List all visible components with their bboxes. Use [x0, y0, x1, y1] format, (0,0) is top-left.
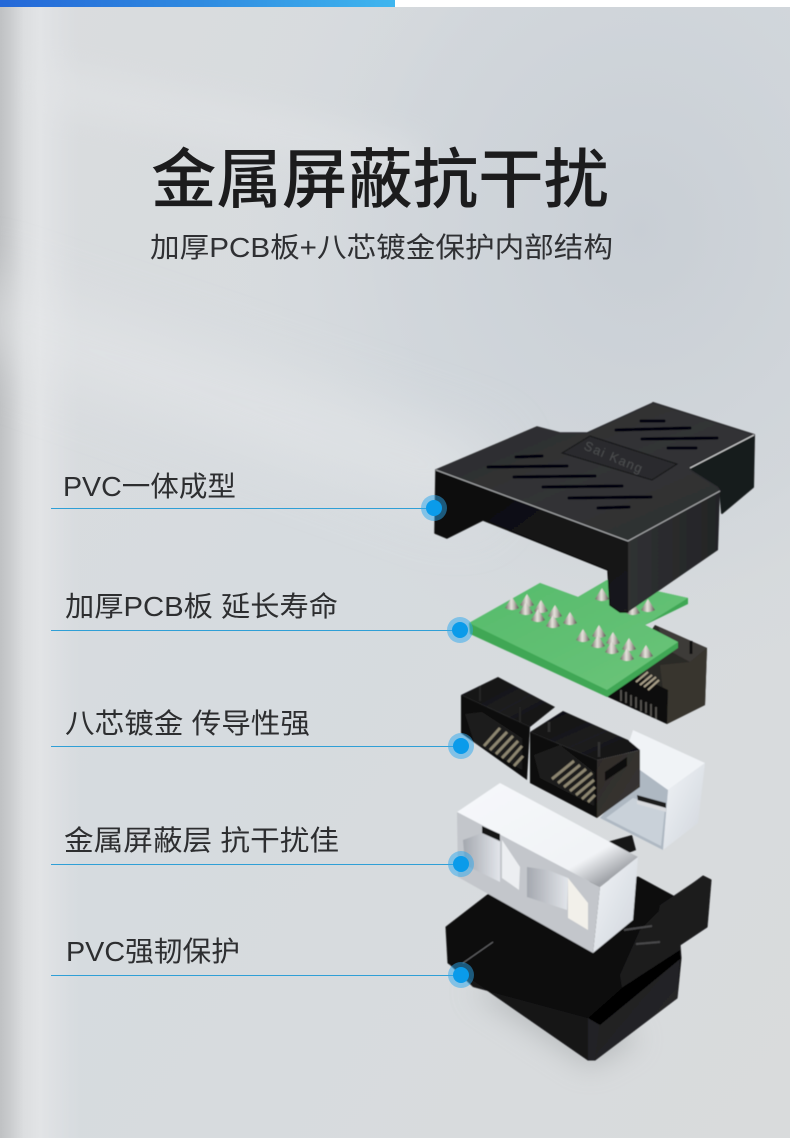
top accent bar	[0, 0, 790, 7]
label: tough PVC protection: PVC强韧保护	[66, 936, 240, 967]
green PCB board	[469, 580, 688, 697]
RJ45 jack right	[530, 711, 640, 818]
cover logo: Sai Kang	[582, 438, 645, 476]
RJ45 jack left	[461, 677, 555, 780]
label: thick PCB board	[51, 591, 473, 643]
cover vent slots	[488, 421, 717, 508]
label: PVC one-piece moulding	[51, 471, 447, 521]
label: gold plated contacts: 八芯镀金 传导性强	[65, 708, 310, 739]
label: metal shield layer: 金属屏蔽层 抗干扰佳	[64, 825, 339, 856]
label: metal shield layer	[51, 825, 474, 877]
label: gold plated contacts	[51, 708, 474, 759]
black top cover	[435, 403, 754, 612]
label: tough PVC protection	[51, 936, 474, 988]
label: PVC one-piece moulding: PVC一体成型	[63, 471, 236, 502]
label: thick PCB board: 加厚PCB板 延长寿命	[65, 591, 338, 622]
rear jack behind PCB	[606, 625, 707, 724]
black bottom tray	[446, 876, 711, 1060]
front metal shield	[457, 783, 638, 953]
subtitle: 加厚PCB板+八芯镀金保护内部结构	[150, 232, 613, 263]
rear metal shield	[600, 730, 705, 850]
title: 金属屏蔽抗干扰	[151, 143, 609, 216]
exploded product illustration	[435, 403, 754, 1060]
